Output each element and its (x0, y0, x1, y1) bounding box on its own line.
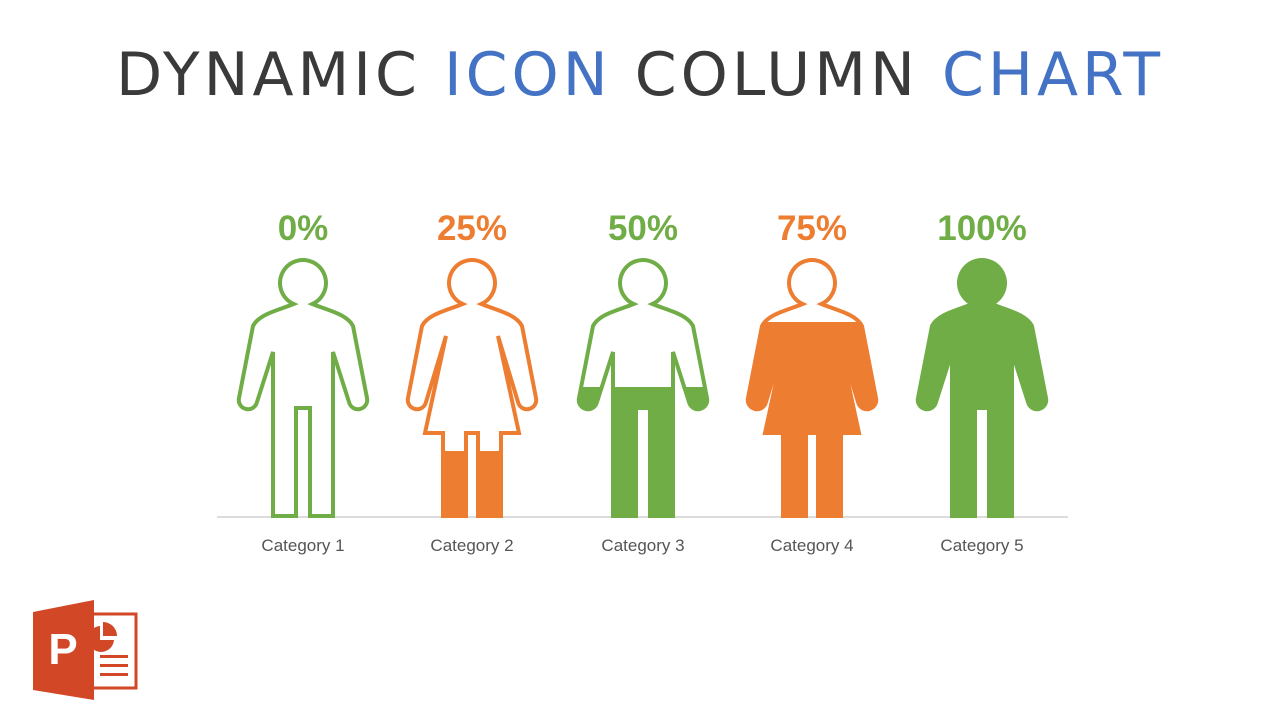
column: category 2 (408, 209, 536, 555)
column: category 1: Category 1 (261, 536, 345, 555)
column: category 4: 75% (777, 209, 847, 248)
title: DYNAMIC ICON COLUMN CHART (116, 40, 1164, 110)
axis line (217, 516, 1068, 518)
column: category 3: 50% (608, 209, 678, 248)
column: category 3 (579, 209, 707, 555)
icon: powerpoint logo (33, 600, 136, 700)
column: category 5: Category 5 (940, 536, 1024, 555)
column: category 5: 100% (937, 209, 1027, 248)
column: category 1 (239, 209, 367, 555)
icon: powerpoint logo: P (48, 625, 78, 674)
column: category 4 (748, 209, 876, 555)
column: category 1: 0% (278, 209, 328, 248)
column: category 4: Category 4 (770, 536, 854, 555)
column: category 3: Category 3 (601, 536, 685, 555)
column: category 2: 25% (437, 209, 507, 248)
column: category 2: Category 2 (430, 536, 514, 555)
column: category 5 (918, 209, 1046, 555)
chart (33, 215, 1068, 700)
